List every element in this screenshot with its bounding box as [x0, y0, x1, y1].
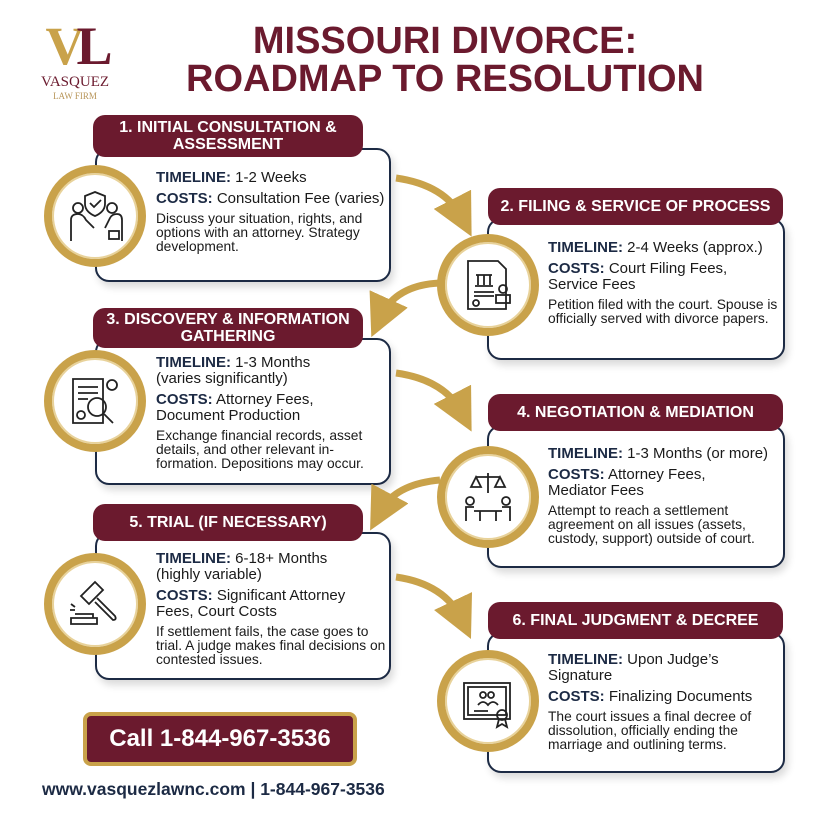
- text: TIMELINE: 1-3 Months (or more): [548, 445, 768, 462]
- call button: Call 1-844-967-3536: [109, 725, 331, 752]
- card 3: [44, 308, 397, 493]
- text: TIMELINE: 1-3 Months: [156, 354, 310, 371]
- text: 3. DISCOVERY & INFORMATION: [106, 311, 350, 328]
- text: TIMELINE: Upon Judge’s: [548, 651, 719, 668]
- title: ROADMAP TO RESOLUTION: [186, 58, 704, 100]
- text: ASSESSMENT: [173, 136, 283, 153]
- text: TIMELINE: 1-2 Weeks: [156, 169, 307, 186]
- text: Fees, Court Costs: [156, 603, 277, 620]
- text: Signature: [548, 667, 612, 684]
- text: Discuss your situation, rights, and options with an attorney. Strategy development.: [156, 211, 362, 254]
- title: MISSOURI DIVORCE:: [253, 20, 637, 62]
- logo: VASQUEZ: [41, 74, 109, 90]
- text: Attempt to reach a settlement agreement on all issues (assets, custody, support) outside of court.: [548, 503, 755, 546]
- text: COSTS: Attorney Fees,: [156, 391, 314, 408]
- text: Petition filed with the court. Spouse is officially served with divorce papers.: [548, 297, 777, 326]
- logo: VL: [45, 16, 105, 76]
- card 6: [437, 602, 791, 781]
- card 2: [437, 188, 791, 368]
- card 4: [437, 394, 791, 576]
- text: Exchange financial records, asset details, and other relevant in-formation. Depositions may occur.: [156, 428, 364, 471]
- text: If settlement fails, the case goes to trial. A judge makes final decisions on contested issues.: [156, 624, 385, 667]
- text: 5. TRIAL (IF NECESSARY): [129, 514, 327, 531]
- text: (varies significantly): [156, 370, 288, 387]
- text: GATHERING: [181, 328, 275, 345]
- text: Service Fees: [548, 276, 636, 293]
- call button: [83, 712, 357, 766]
- card 1: [44, 115, 397, 290]
- text: 1. INITIAL CONSULTATION &: [119, 119, 337, 136]
- text: 6. FINAL JUDGMENT & DECREE: [513, 612, 758, 629]
- text: Document Production: [156, 407, 300, 424]
- logo: LAW FIRM: [53, 91, 97, 101]
- text: COSTS: Significant Attorney: [156, 587, 345, 604]
- text: COSTS: Consultation Fee (varies): [156, 190, 384, 207]
- text: COSTS: Court Filing Fees,: [548, 260, 727, 277]
- title: [186, 20, 704, 100]
- text: TIMELINE: 6-18+ Months: [156, 550, 327, 567]
- text: The court issues a final decree of dissolution, officially ending the marriage and outlining terms.: [548, 709, 751, 752]
- text: 4. NEGOTIATION & MEDIATION: [517, 404, 754, 421]
- text: TIMELINE: 2-4 Weeks (approx.): [548, 239, 763, 256]
- card 5: [44, 504, 397, 688]
- text: Mediator Fees: [548, 482, 644, 499]
- text: (highly variable): [156, 566, 262, 583]
- text: 2. FILING & SERVICE OF PROCESS: [500, 198, 770, 215]
- text: COSTS: Attorney Fees,: [548, 466, 706, 483]
- text: COSTS: Finalizing Documents: [548, 688, 752, 705]
- footer: www.vasquezlawnc.com | 1-844-967-3536: [42, 779, 385, 799]
- logo: [41, 16, 110, 101]
